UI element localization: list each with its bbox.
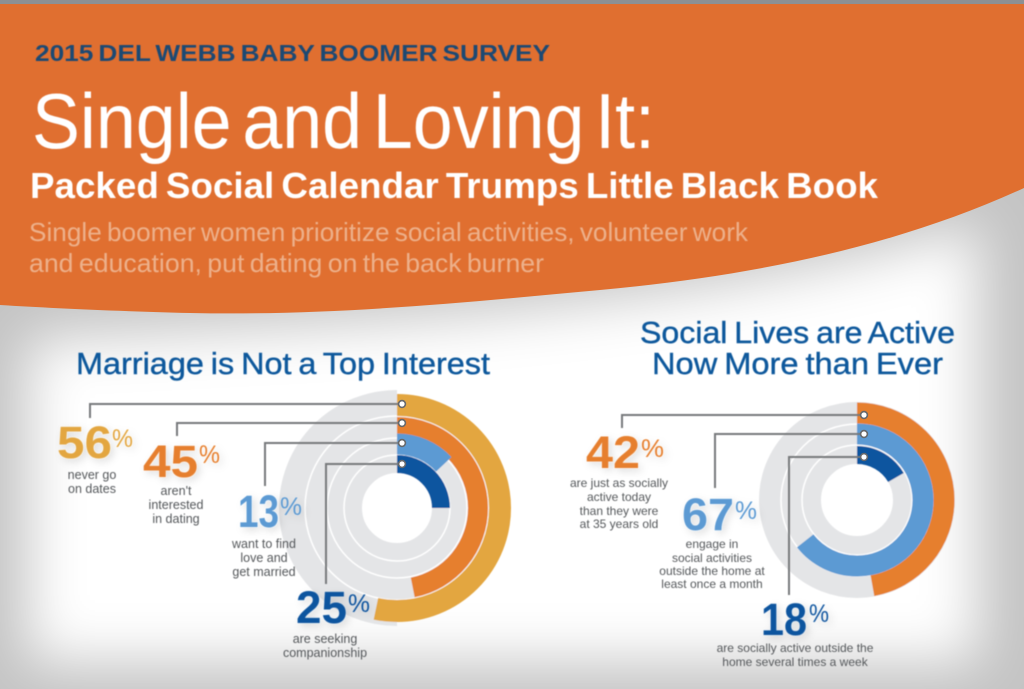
- caption: 13%: want to find: [231, 537, 296, 551]
- top edge strip: [0, 0, 1024, 4]
- stat: 45%: 45: [143, 436, 198, 487]
- caption: 67%: engage in: [686, 537, 738, 551]
- caption: 67%: social activities: [672, 551, 752, 565]
- stat: 25%: %: [348, 590, 370, 618]
- caption: 56%: never go: [68, 468, 116, 482]
- caption: 25%: are seeking: [293, 632, 357, 646]
- stat: 25%: [296, 582, 370, 633]
- panel: social lives are active: [570, 315, 955, 669]
- caption: 18%: are socially active outside the: [717, 641, 874, 655]
- stat: 42%: %: [641, 435, 664, 463]
- leader lines: social: [622, 415, 862, 595]
- heading: social lives: [640, 315, 955, 381]
- stat: 13%: %: [280, 493, 302, 521]
- caption: 45%: interested: [149, 498, 203, 512]
- caption: 13%: get married: [232, 565, 296, 579]
- caption: 42%: than they were: [580, 504, 659, 518]
- caption: 67%: least once a month: [661, 577, 763, 591]
- leader dots: social: [861, 412, 867, 460]
- caption: 18%: home several times a week: [722, 655, 869, 669]
- leader dots: marriage: [399, 401, 405, 467]
- stat: 45%: %: [199, 441, 220, 469]
- heading: social lives: Now More than Ever: [652, 346, 943, 381]
- caption: 67%: [659, 537, 765, 591]
- caption: 67%: outside the home at: [659, 564, 765, 578]
- caption: 56%: [68, 468, 116, 496]
- leader lines: marriage: [90, 404, 400, 584]
- heading: social lives: Social Lives are Active: [640, 315, 955, 350]
- caption: 42%: [570, 476, 668, 531]
- stat: 67%: 67: [682, 489, 734, 540]
- caption: 42%: active today: [587, 490, 651, 504]
- caption: 45%: [149, 484, 203, 526]
- stat: 18%: 18: [761, 594, 807, 645]
- stat: 56%: [57, 417, 133, 468]
- stat: 45%: [143, 436, 220, 487]
- header description: Single boomer women prioritize social activities, volunteer work: [29, 217, 749, 247]
- concentric ring chart: social: [770, 413, 944, 587]
- stat: 42%: [586, 427, 664, 478]
- caption: 25%: [283, 632, 367, 660]
- orange header banner: [0, 4, 1024, 313]
- concentric ring chart: marriage: [293, 404, 501, 612]
- survey label: 2015 DEL WEBB BABY BOOMER SURVEY: [35, 40, 550, 66]
- caption: 45%: in dating: [152, 512, 200, 526]
- stat: 67%: %: [735, 497, 757, 525]
- subtitle: Packed Social Calendar Trumps Little Black Book: [30, 165, 879, 206]
- header description: and education, put dating on the back burner: [29, 248, 544, 278]
- stat: 13%: 13: [238, 486, 279, 537]
- caption: 13%: [231, 537, 296, 579]
- caption: 45%: aren't: [161, 484, 192, 498]
- caption: 56%: on dates: [68, 482, 116, 496]
- stat: 18%: %: [809, 600, 829, 628]
- caption: 25%: companionship: [283, 646, 367, 660]
- stat: 56%: %: [112, 425, 133, 453]
- main title: Single and Loving It:: [32, 77, 655, 165]
- stat: 25%: 25: [296, 582, 347, 633]
- caption: 18%: [717, 641, 874, 669]
- panel: marriage is not a top interest: [57, 346, 501, 660]
- caption: 42%: are just as socially: [570, 476, 668, 490]
- caption: 13%: love and: [240, 551, 288, 565]
- stat: 67%: [682, 489, 757, 540]
- stat: 42%: 42: [586, 427, 640, 478]
- caption: 42%: at 35 years old: [580, 517, 658, 531]
- header description: [29, 217, 749, 278]
- heading: marriage: Marriage is Not a Top Interest: [76, 346, 490, 381]
- stat: 56%: 56: [57, 417, 112, 468]
